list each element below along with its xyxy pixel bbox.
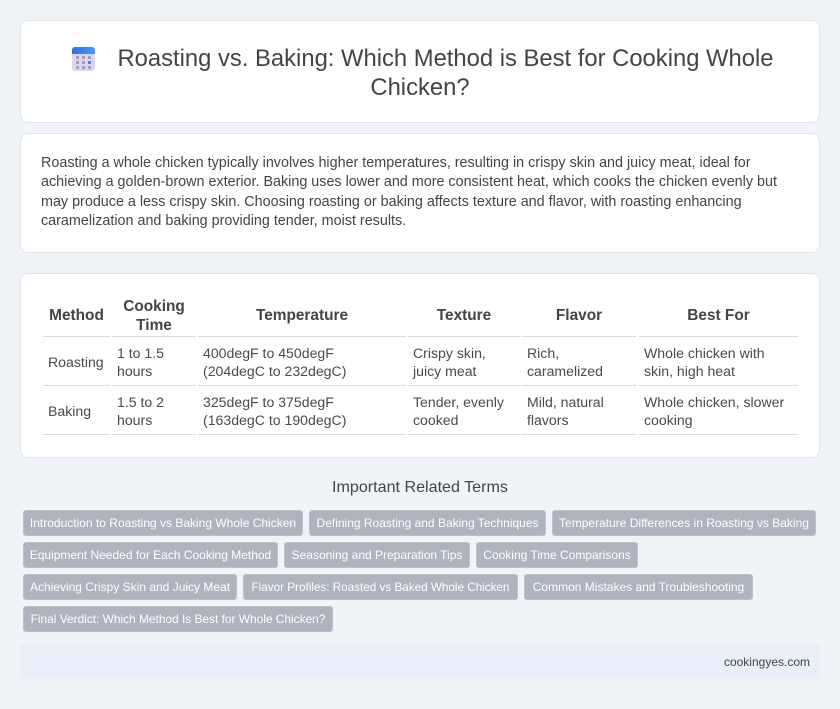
table row: roasting: 1 to 1.5: [117, 345, 164, 361]
panel: title card: [20, 20, 820, 123]
related term tags: Cooking Time Comparisons: [483, 548, 631, 562]
title: Chicken?: [370, 74, 470, 101]
table header: Time: [136, 317, 172, 334]
table row: roasting: Rich,: [527, 345, 559, 361]
related term tags: Seasoning and Preparation Tips: [292, 548, 462, 562]
title: [117, 45, 774, 101]
table header: Best For: [687, 307, 750, 324]
table row: roasting: (204degC to 232degC): [203, 363, 346, 379]
intro text: caramelization and baking providing tender, moist results.: [41, 213, 406, 229]
table row: baking: hours: [117, 412, 152, 428]
table row: roasting: Crispy skin,: [413, 345, 486, 361]
related term tags: Achieving Crispy Skin and Juicy Meat: [30, 580, 230, 594]
table row: roasting: [48, 345, 765, 379]
intro text: Roasting a whole chicken typically involves higher temperatures, resulting in crispy skin and juicy meat, ideal for: [41, 155, 751, 171]
table row: baking: Mild, natural: [527, 394, 604, 410]
table header: Cooking: [123, 298, 185, 315]
table row: baking: cooked: [413, 412, 458, 428]
related term tags: Common Mistakes and Troubleshooting: [533, 580, 744, 594]
footer bar: [20, 645, 820, 679]
intro text: may produce a less crispy skin. Choosing roasting or baking affects texture and flavor, with roasting enhancing: [41, 194, 742, 210]
table row: roasting: juicy meat: [413, 363, 476, 379]
table row: baking: [48, 394, 784, 428]
comparison table: [43, 298, 798, 435]
table row: roasting: caramelized: [527, 363, 603, 379]
intro text: achieving a golden-brown exterior. Baking uses lower and more consistent heat, which cooks the chicken evenly but: [41, 174, 777, 190]
table row: roasting: Whole chicken with: [644, 345, 765, 361]
table header: Temperature: [256, 307, 348, 324]
table row: baking: cooking: [644, 412, 693, 428]
table row: baking: Baking: [48, 403, 91, 419]
intro text: [41, 155, 777, 229]
table header: [49, 298, 750, 334]
table header: Flavor: [556, 307, 602, 324]
related term tags: Final Verdict: Which Method Is Best for Whole Chicken?: [31, 612, 325, 626]
table row: baking: flavors: [527, 412, 569, 428]
related term tags: Temperature Differences in Roasting vs Baking: [559, 516, 809, 530]
table row: roasting: 400degF to 450degF: [203, 345, 334, 361]
related term tags: [23, 510, 816, 632]
table row: baking: 1.5 to 2: [117, 394, 164, 410]
table row: baking: (163degC to 190degC): [203, 412, 346, 428]
table row: roasting: skin, high heat: [644, 363, 735, 379]
panel: introduction: [20, 133, 820, 253]
table row: roasting: hours: [117, 363, 152, 379]
table row: roasting: Roasting: [48, 354, 104, 370]
footer source: cookingyes.com: [724, 655, 810, 669]
related term tags: Introduction to Roasting vs Baking Whole Chicken: [30, 516, 296, 530]
panel: comparison table: [20, 273, 820, 458]
table row: baking: Tender, evenly: [413, 394, 504, 410]
related term tags: Flavor Profiles: Roasted vs Baked Whole Chicken: [252, 581, 509, 594]
related term tags: Equipment Needed for Each Cooking Method: [30, 548, 271, 562]
table row: baking: Whole chicken, slower: [644, 394, 784, 410]
table row: baking: 325degF to 375degF: [203, 394, 334, 410]
heading: related terms: Important Related Terms: [332, 478, 508, 496]
title: Roasting vs. Baking: Which Method is Best for Cooking Whole: [117, 45, 774, 72]
table header: Texture: [437, 307, 491, 324]
icon: calendar: [72, 47, 95, 71]
table header: Method: [49, 307, 104, 324]
related term tags: Defining Roasting and Baking Techniques: [317, 516, 538, 530]
